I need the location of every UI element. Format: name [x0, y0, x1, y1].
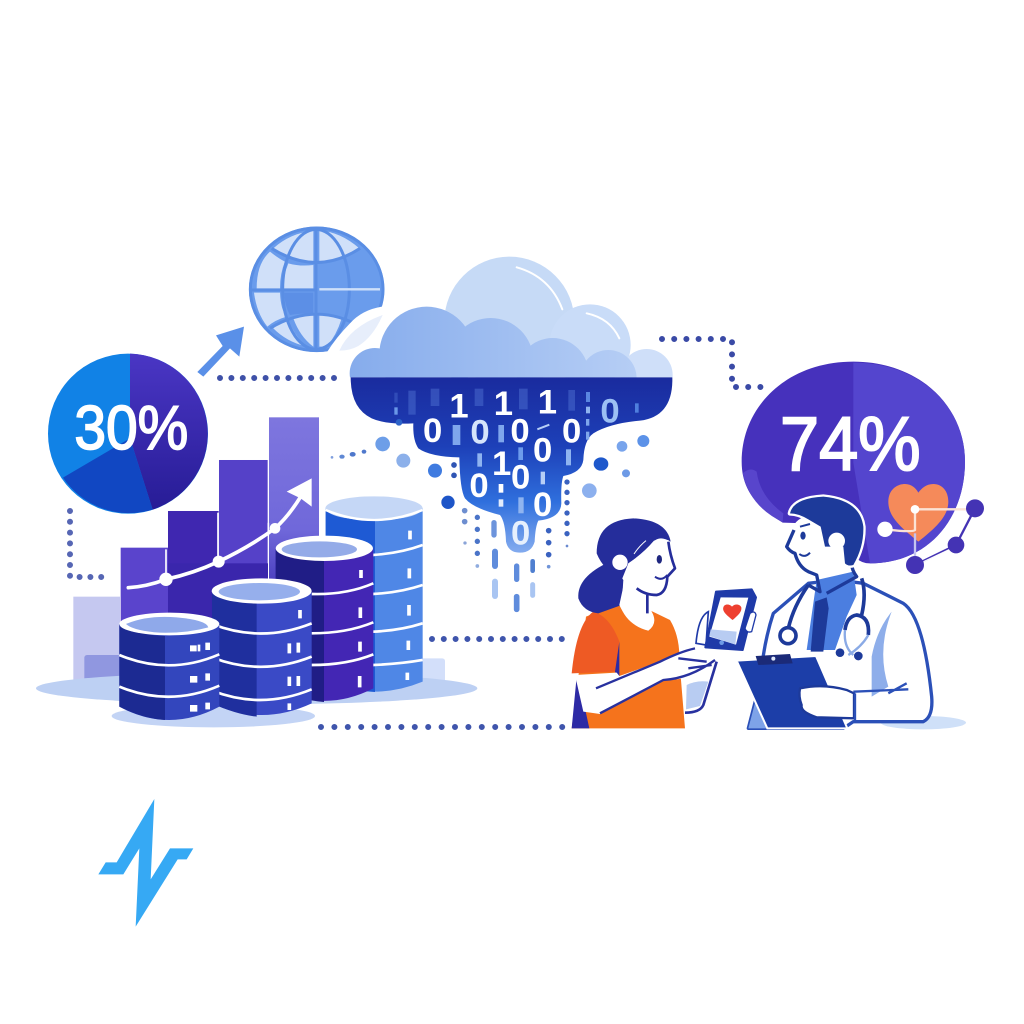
bar chart — [121, 417, 319, 648]
binary digits: 0 — [470, 413, 490, 451]
binary digits: 1 — [494, 385, 513, 423]
database stack 1 — [119, 613, 219, 720]
dotted connector: globe to cloud — [220, 375, 342, 381]
binary digits: 1 — [492, 445, 511, 483]
dotted connector: bottom line — [321, 724, 563, 730]
cloud upper part — [350, 256, 673, 378]
binary digits: 0 — [511, 514, 530, 552]
left section: charts and databases — [36, 227, 477, 727]
binary digits: 0 — [533, 432, 552, 470]
doctor and patient scene — [572, 362, 984, 729]
binary digits: 0 — [511, 458, 530, 496]
clipboard — [737, 654, 847, 728]
ground shadow — [881, 716, 966, 729]
heart with health network — [877, 484, 984, 574]
patient face and neck — [619, 540, 675, 631]
patient torso — [572, 605, 685, 728]
binary digits: 0 — [423, 412, 442, 450]
patient other arm — [686, 681, 708, 709]
pale background bar — [73, 597, 121, 694]
binary digits: 0 — [469, 467, 489, 505]
database stack 4 — [325, 496, 423, 692]
binary digits: 1 — [538, 384, 557, 422]
binary digits: 0 — [562, 413, 581, 451]
label: 74%: 74% — [780, 402, 921, 487]
pie chart 74 percent — [742, 362, 965, 563]
patient — [572, 518, 756, 728]
dotted connector: cloud to doctor — [662, 339, 762, 387]
doctor coat — [748, 580, 932, 728]
doctor hair — [790, 497, 863, 566]
stethoscope — [780, 578, 869, 655]
label: 30%: 30% — [74, 394, 188, 463]
droplets and dots — [331, 419, 649, 509]
phone — [696, 589, 756, 650]
database stack 2 — [212, 578, 312, 717]
line chart trend arrow — [128, 478, 312, 588]
arrow to globe — [197, 327, 244, 377]
globe icon — [249, 227, 397, 363]
falling data streams — [454, 465, 567, 609]
dotted connector: database to patient — [432, 636, 565, 642]
database stack 3 — [276, 536, 373, 702]
doctor hand and sleeve — [799, 686, 854, 718]
faint data bars — [394, 389, 639, 513]
cloud lower data shape — [351, 377, 672, 553]
binary digits: 0 — [533, 486, 552, 524]
doctor — [737, 497, 932, 728]
binary digits: 1 — [449, 388, 469, 426]
pie chart 30 percent — [48, 354, 208, 514]
patient arm and hand — [575, 646, 717, 714]
binary digits: 0 — [510, 412, 530, 450]
ground shadow — [36, 658, 477, 727]
patient sleeve — [572, 612, 619, 673]
lightning logo — [98, 799, 193, 927]
cloud with binary data — [331, 257, 673, 609]
binary digits: 0 — [600, 392, 620, 430]
patient hair — [597, 518, 671, 580]
doctor shirt and tie — [807, 572, 857, 650]
dotted connector: pie to charts — [70, 511, 107, 577]
doctor head — [784, 513, 857, 576]
binary digits — [423, 384, 620, 552]
